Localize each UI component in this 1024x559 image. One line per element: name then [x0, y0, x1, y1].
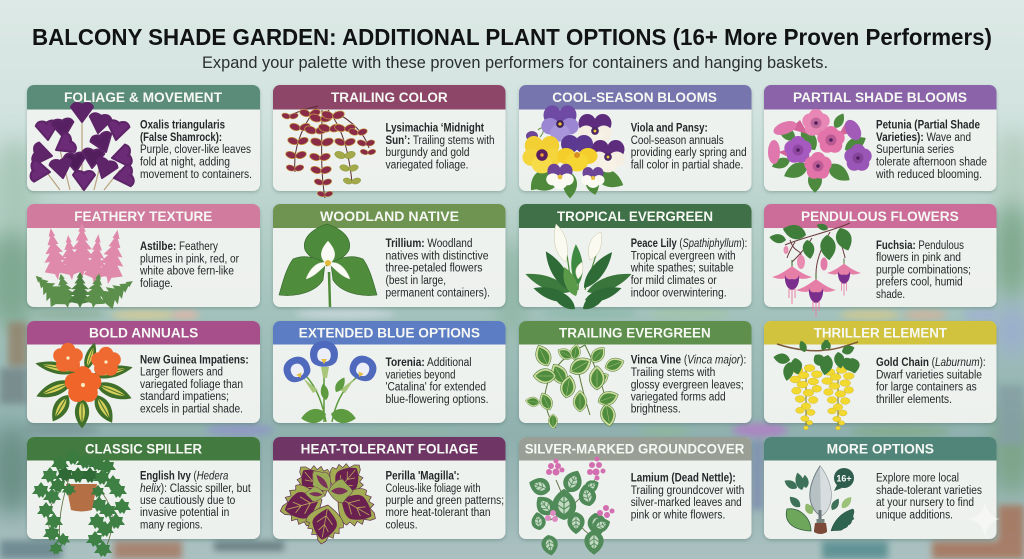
text: torenia: Torenia: Additional [386, 357, 472, 369]
header: trailing evergreen [519, 321, 752, 344]
text: english ivy [140, 471, 251, 531]
header: classic spiller: CLASSIC SPILLER [85, 442, 202, 457]
header: cool-season blooms [519, 85, 752, 110]
icon: english ivy in pot [32, 449, 131, 557]
icon: trowel, leaves and 16+ badge [783, 466, 854, 534]
panel: tropical evergreen [519, 204, 752, 314]
text: vinca: variegated forms add [631, 392, 726, 404]
text: trillium: (best in large, [386, 275, 446, 287]
text: petunia: with reduced blooming. [875, 169, 982, 181]
text: torenia [386, 357, 488, 406]
panel: foliage & movement [27, 85, 260, 191]
text: viola: providing early spring and [631, 147, 747, 159]
text: oxalis [140, 120, 252, 181]
text: impatiens: New Guinea Impatiens: [140, 354, 249, 366]
header: foliage & movement [27, 85, 260, 110]
text: torenia: 'Catalina' for extended [386, 382, 486, 394]
text: trillium: natives with distinctive [386, 250, 488, 262]
icon: vinca [525, 342, 626, 429]
text: impatiens [140, 354, 249, 415]
header: feathery texture: FEATHERY TEXTURE [74, 209, 212, 224]
text: astilbe: foliage. [140, 278, 173, 290]
text: english ivy: use cautiously due to [140, 495, 235, 507]
text: english ivy: English Ivy (Hedera [140, 471, 228, 483]
header: classic spiller [27, 437, 260, 460]
icon: oxalis [30, 103, 135, 190]
text: lamium: Trailing groundcover with [631, 485, 744, 497]
text: vinca [631, 355, 746, 416]
text: peace lily: for mild climates or [631, 275, 717, 287]
text: oxalis: Oxalis triangularis [140, 120, 225, 132]
text: peace lily: Peace Lily (Spathiphyllum): [631, 238, 747, 250]
text: lamium: Lamium (Dead Nettle): [631, 473, 736, 485]
text: fuchsia [876, 240, 971, 301]
panel: more options [764, 437, 996, 539]
icon: fuchsia [769, 222, 861, 317]
text: vinca: Vinca Vine (Vinca major): [631, 355, 746, 367]
header: more options: MORE OPTIONS [827, 442, 934, 457]
panel: heat-tolerant foliage [273, 437, 506, 547]
text: viola [631, 122, 747, 172]
panel: pendulous flowers [764, 204, 996, 317]
text: more options: unique additions. [876, 509, 953, 521]
text: petunia: Petunia (Partial Shade [876, 120, 980, 132]
header: cool-season blooms: COOL-SEASON BLOOMS [552, 90, 717, 105]
subtitle: Expand your palette with these proven performers for containers and hanging baskets. [202, 53, 828, 72]
panel: bold annuals [27, 321, 260, 428]
text: viola: fall color in partial shade. [631, 160, 743, 172]
text: more options [876, 473, 982, 521]
header: trailing color [273, 85, 506, 110]
header: heat-tolerant foliage [273, 437, 506, 460]
text: perilla: Perilla 'Magilla': [386, 471, 460, 483]
panel: extended blue options [273, 321, 506, 425]
text: vinca: brightness. [631, 404, 681, 416]
icon: laburnum [773, 338, 861, 430]
text: fuchsia: flowers in pink and [876, 252, 961, 264]
text: viola: Cool-season annuals [631, 135, 724, 147]
panel: trailing color [273, 85, 506, 198]
icon: pansies [522, 105, 627, 198]
text: oxalis: Purple, clover-like leaves [140, 144, 251, 156]
text: vinca: Trailing stems with [631, 367, 715, 379]
header: silver-marked groundcover [519, 437, 752, 460]
text: lysimachia [386, 122, 494, 172]
icon: torenia [280, 341, 380, 425]
text: impatiens: Larger flowers and [140, 367, 223, 379]
text: lysimachia: Sun’: Trailing stems with [386, 135, 494, 147]
header: heat-tolerant foliage: HEAT-TOLERANT FOLIAGE [301, 442, 478, 457]
text: laburnum: for large containers as [876, 382, 977, 394]
panel: classic spiller [27, 437, 260, 557]
panel: woodland native [273, 204, 506, 307]
icon: trowel, leaves and 16+ badge: 16+ [836, 474, 852, 484]
icon: astilbe [28, 223, 139, 313]
text: lamium: pink or white flowers. [631, 509, 725, 521]
text: astilbe: plumes in pink, red, or [140, 253, 239, 265]
text: more options: at your nursery to find [876, 497, 974, 509]
text: oxalis: (False Shamrock): [140, 132, 222, 144]
text: petunia: tolerate afternoon shade [876, 156, 987, 168]
header: trailing color: TRAILING COLOR [331, 90, 448, 105]
text: laburnum: Dwarf varieties suitable [876, 369, 982, 381]
icon: perilla [275, 453, 385, 547]
panel: partial shade blooms [764, 85, 996, 193]
text: astilbe: Astilbe: Feathery [140, 241, 218, 253]
text: oxalis: movement to containers. [140, 169, 252, 181]
text: laburnum: Gold Chain (Laburnum): [876, 357, 986, 369]
text: fuchsia: purple combinations; [876, 264, 971, 276]
text: laburnum: thriller elements. [876, 394, 952, 406]
text: petunia: Varieties): Wave and [876, 132, 971, 144]
text: lysimachia: variegated foliage. [386, 160, 468, 172]
text: trillium: permanent containers). [386, 287, 490, 299]
text: viola: Viola and Pansy: [631, 122, 708, 134]
icon: sparkle [968, 502, 1000, 536]
text: perilla: coleus. [386, 519, 418, 531]
text: lamium: silver-marked leaves and [631, 497, 742, 509]
text: lamium [631, 473, 744, 521]
icon: impatiens [34, 341, 134, 428]
text: perilla: purple and green patterns; [386, 495, 504, 507]
header: extended blue options [273, 321, 506, 344]
icon: lysimachia [281, 106, 376, 198]
header: foliage & movement: FOLIAGE & MOVEMENT [64, 90, 223, 105]
header: pendulous flowers: PENDULOUS FLOWERS [801, 209, 959, 224]
text: impatiens: excels in partial shade. [140, 403, 243, 415]
header: feathery texture [27, 204, 260, 228]
panel: thriller element [764, 321, 996, 430]
header: woodland native [273, 204, 506, 228]
header: woodland native: WOODLAND NATIVE [320, 209, 459, 224]
text: oxalis: fold at night, adding [140, 156, 230, 168]
title: BALCONY SHADE GARDEN: ADDITIONAL PLANT OPTIONS (16+ More Proven Performers) [32, 24, 992, 50]
header: extended blue options: EXTENDED BLUE OPTIONS [299, 326, 480, 341]
header: tropical evergreen: TROPICAL EVERGREEN [557, 209, 713, 224]
text: trillium: three-petaled flowers [386, 263, 483, 275]
header: thriller element [764, 321, 996, 344]
text: english ivy: many regions. [140, 519, 203, 531]
header: partial shade blooms [764, 85, 996, 110]
header: bold annuals: BOLD ANNUALS [89, 326, 198, 341]
header: bold annuals [27, 321, 260, 344]
icon: petunia [768, 109, 872, 193]
text: impatiens: standard impatiens; [140, 391, 229, 403]
header: pendulous flowers [764, 204, 996, 228]
text: perilla [386, 471, 504, 531]
text: peace lily: Tropical evergreen with [631, 250, 736, 262]
header: more options [764, 437, 996, 460]
icon: peace lily [523, 224, 634, 314]
header: partial shade blooms: PARTIAL SHADE BLOOMS [793, 90, 967, 105]
icon: trillium [279, 224, 377, 307]
text: torenia: varieties beyond [386, 369, 456, 381]
text: astilbe [139, 241, 239, 290]
text: lysimachia: burgundy and gold [386, 147, 470, 159]
text: more options: Explore more local [876, 473, 959, 485]
text: laburnum [876, 357, 986, 406]
icon: lamium [526, 456, 614, 557]
text: perilla: more heat-tolerant than [386, 507, 490, 519]
text: peace lily: white spathes; suitable [630, 263, 734, 275]
text: vinca: glossy evergreen leaves; [631, 379, 744, 391]
header: thriller element: THRILLER ELEMENT [814, 326, 948, 341]
text: fuchsia: shade. [876, 289, 905, 301]
text: astilbe: white above fern-like [139, 266, 234, 278]
panel: feathery texture [27, 204, 260, 313]
text: perilla: Coleus-like foliage with [386, 483, 480, 495]
text: fuchsia: prefers cool, humid [876, 277, 963, 289]
header: trailing evergreen: TRAILING EVERGREEN [559, 326, 711, 341]
text: trillium: Trillium: Woodland [386, 238, 472, 250]
text: fuchsia: Fuchsia: Pendulous [876, 240, 964, 252]
text: peace lily: indoor overwintering. [631, 287, 727, 299]
panel: trailing evergreen [519, 321, 752, 429]
text: lysimachia: Lysimachia ‘Midnight [386, 122, 484, 134]
text: more options: shade-tolerant varieties [876, 485, 982, 497]
text: english ivy: invasive potential in [140, 507, 229, 519]
text: trillium [386, 238, 490, 299]
text: petunia: Supertunia series [876, 144, 954, 156]
header: tropical evergreen [519, 204, 752, 228]
text: torenia: blue-flowering options. [386, 394, 488, 406]
panel: silver-marked groundcover [519, 437, 752, 557]
text: peace lily [630, 238, 747, 299]
text: english ivy: helix): Classic spiller, but [140, 483, 251, 495]
text: petunia [875, 120, 987, 181]
text: impatiens: variegated foliage than [140, 379, 243, 391]
panel: cool-season blooms [519, 85, 752, 198]
header: silver-marked groundcover: SILVER-MARKED GROUNDCOVER [525, 442, 745, 457]
